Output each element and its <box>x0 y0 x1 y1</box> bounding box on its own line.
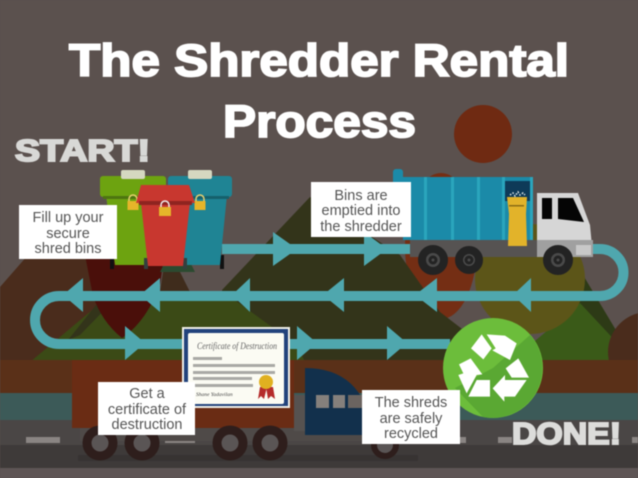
icon: teal bin <box>168 170 232 269</box>
landscape: hills and trees <box>0 105 638 392</box>
wheels <box>422 249 569 271</box>
icon: certificate of destruction <box>182 327 290 408</box>
callout: recycled: The shreds <box>375 395 447 411</box>
icon: garbage truck <box>393 169 593 271</box>
callout: certificate <box>98 382 195 435</box>
callout: bins emptied: emptied into <box>322 203 400 219</box>
container <box>393 169 533 246</box>
callout: fill up bins <box>19 205 117 259</box>
callout: fill up bins: secure <box>46 226 90 242</box>
callout: certificate: certificate of <box>108 402 187 418</box>
icon: recycling symbol <box>443 318 543 418</box>
title: Process <box>223 96 416 147</box>
title <box>69 35 569 147</box>
icon: green bin <box>100 170 166 269</box>
icon: shred bins <box>100 170 232 269</box>
callout: recycled: recycled <box>384 426 438 442</box>
certificate signature: Shane Yadavilan <box>196 392 233 398</box>
callout: certificate: destruction <box>112 417 182 433</box>
icon: red bin <box>136 185 195 269</box>
icon: seal <box>258 375 275 399</box>
callout: bins emptied: the shredder <box>320 219 402 235</box>
icon: side padlocks <box>128 195 206 210</box>
ground bands and road <box>0 360 638 478</box>
callout: fill up bins: Fill up your <box>33 210 104 226</box>
callout: fill up bins: shred bins <box>35 241 101 257</box>
callout: recycled: are safely <box>380 411 443 427</box>
callout: bins emptied <box>311 182 411 237</box>
certificate title: Certificate of Destruction <box>197 341 277 351</box>
done label: DONE! <box>512 416 621 451</box>
callout: bins emptied: Bins are <box>334 188 388 204</box>
delivery truck in background <box>72 360 418 461</box>
process path with arrows <box>35 232 624 360</box>
callout: recycled <box>362 390 460 444</box>
start label: START! <box>15 133 150 168</box>
certificate lines <box>193 357 275 387</box>
title: The Shredder Rental <box>69 35 569 86</box>
truck chassis <box>410 240 545 257</box>
cab <box>537 193 593 257</box>
callout: certificate: Get a <box>129 386 166 402</box>
